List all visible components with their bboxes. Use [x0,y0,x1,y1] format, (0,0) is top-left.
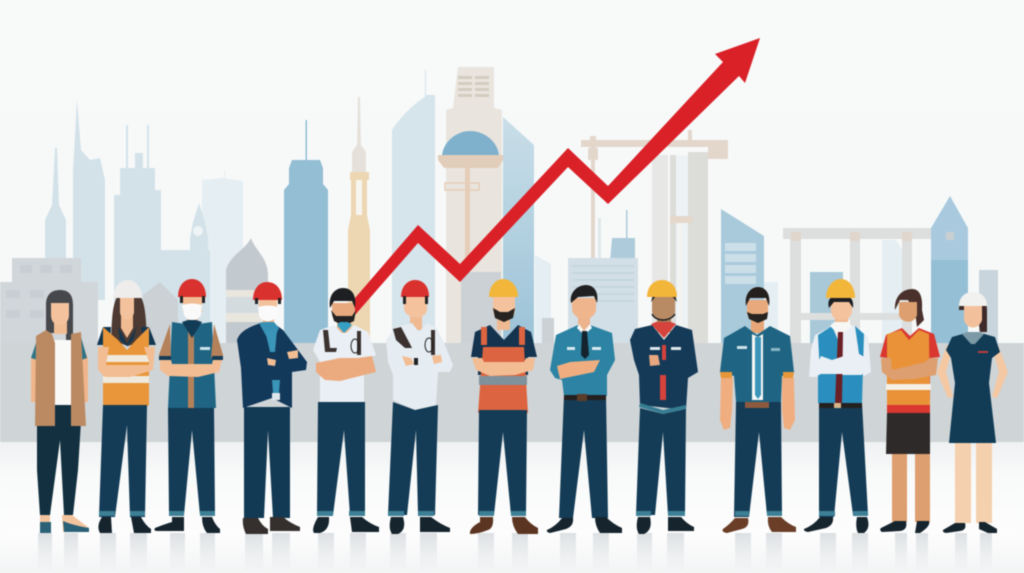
figure 5: bearded man in white shirt [313,288,379,533]
skyline: tan spire tower [348,97,370,343]
figure 12: woman in orange vest and dark skirt [880,289,940,533]
skyline: central blue tower [284,120,328,343]
figure 7: bearded man in orange vest and yellow helmet [470,279,538,534]
figure 2: woman in orange safety vest [97,280,156,533]
figure 9: man in navy jacket and yellow helmet [630,280,698,534]
red rising arrow [355,38,760,315]
grey horizon band [0,343,1024,442]
figure 1: woman in brown vest [31,290,89,533]
skyline: pale blue tall tower [392,70,435,343]
background sky [0,0,1024,445]
figure 8: man in teal shirt with black tie [547,285,622,533]
figure 6: man in white shirt and red helmet [386,280,453,534]
skyline: far right grey block [979,270,998,343]
skyline: concrete frame [783,228,935,343]
floor reflections [38,533,992,571]
skyline: building under construction [652,152,708,343]
clock face [193,226,203,236]
figure 10: bearded man in teal shirt, arms at sides [720,287,796,533]
skyline: construction crane [581,130,728,260]
figure 11: man in blue vest and yellow helmet [804,279,871,533]
skyline: blue low block behind frame [810,272,843,343]
skyline: right peaked tower [931,196,968,343]
floor [0,442,1024,573]
skyline: slanted roof blue tower [721,209,764,343]
skyline: grey mid blocks [143,272,554,343]
skyline: left blue towers [45,100,210,343]
skyline: beige tower with dome [438,67,503,343]
skyline: blue office block [568,210,638,343]
figure 3: man in teal shirt and red helmet with mask [154,279,223,533]
skyline: pale background buildings [202,170,902,343]
figure 13: woman in navy dress with white helmet [937,292,1008,533]
skyline: blue angled tower [503,117,534,343]
figure 4: man in navy suit with mask [237,282,307,534]
skyline: left grey building [0,258,98,343]
skyline: grey dome building [226,238,268,343]
